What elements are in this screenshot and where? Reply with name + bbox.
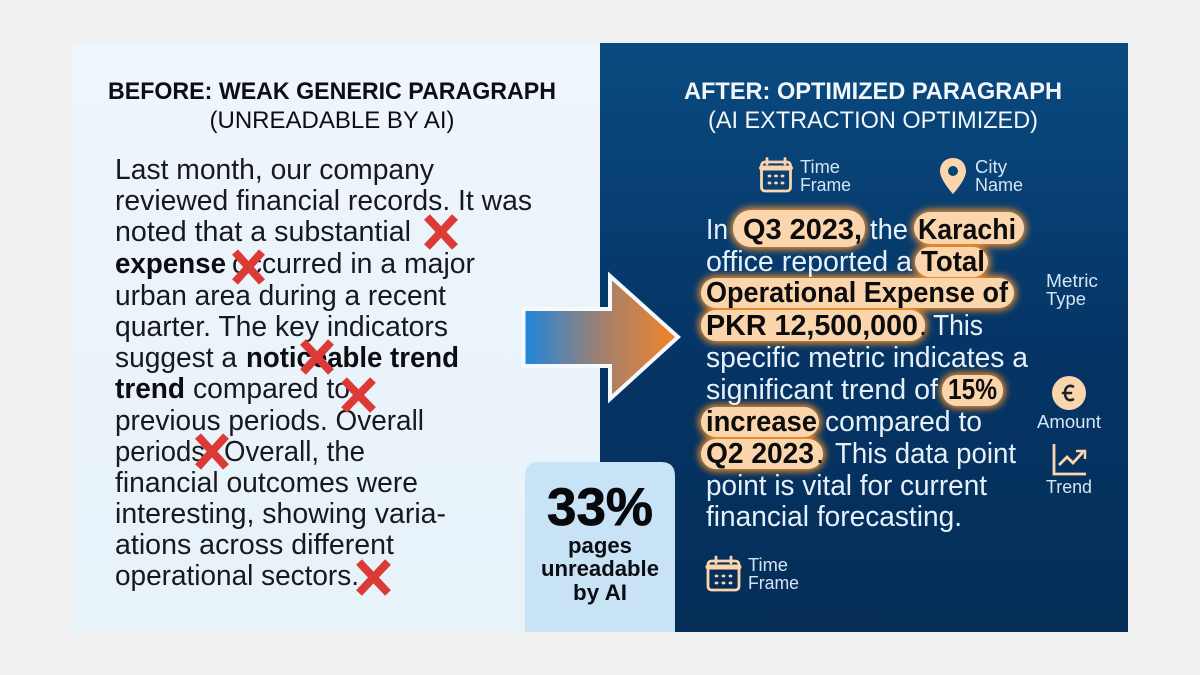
label: city name: City: [975, 156, 1008, 177]
text block: weak paragraph: interesting, showing varia-: [115, 498, 446, 530]
text block: weak paragraph: reviewed financial records. It was: [115, 185, 532, 217]
label: time frame top: Frame: [800, 174, 851, 195]
text block: weak paragraph: suggest a: [115, 342, 237, 374]
text block: weak paragraph: noticeable trend: [246, 342, 459, 374]
text block: optimized paragraph: office reported a: [706, 246, 912, 278]
icon: calendar time frame: [762, 158, 790, 191]
text block: weak paragraph: quarter. The key indicators: [115, 311, 448, 343]
text block: optimized paragraph: In: [706, 214, 728, 246]
label: time frame bottom: [748, 554, 799, 593]
text block: optimized paragraph: compared to: [825, 406, 982, 438]
text block: optimized paragraph: financial forecasting.: [706, 501, 962, 533]
text block: optimized paragraph: .: [919, 310, 927, 342]
text block: optimized paragraph: increase: [706, 406, 817, 438]
label: city name: [975, 156, 1023, 195]
text block: optimized paragraph: This: [933, 310, 983, 342]
label: trend: Trend: [1046, 476, 1092, 497]
stat value: 33%: [547, 478, 653, 537]
label: metric type: Type: [1046, 288, 1086, 309]
label: time frame top: Time: [800, 156, 840, 177]
text block: optimized paragraph: .: [816, 438, 824, 470]
text block: weak paragraph: ations across different: [115, 529, 394, 561]
text block: optimized paragraph: Total: [921, 246, 985, 278]
text block: weak paragraph: compared to: [193, 373, 350, 405]
text block: optimized paragraph: specific metric indicates a: [706, 342, 1028, 374]
label: metric type: [1046, 270, 1098, 309]
text block: weak paragraph: Last month, our company: [115, 154, 435, 186]
label: city name: Name: [975, 174, 1023, 195]
heading: before: BEFORE: WEAK GENERIC PARAGRAPH: [108, 78, 556, 105]
panel: before: [72, 43, 600, 632]
stat caption: pages: [568, 533, 632, 558]
text block: weak paragraph: Overall, the: [224, 436, 365, 468]
heading: before: (UNREADABLE BY AI): [210, 107, 454, 134]
text block: optimized paragraph: the: [870, 214, 908, 246]
text block: optimized paragraph: Q3 2023,: [743, 214, 862, 246]
text block: weak paragraph: expense: [115, 248, 226, 280]
heading: after: [684, 78, 1062, 134]
highlights: key data pills: [701, 210, 1024, 469]
text block: optimized paragraph: significant trend of: [706, 374, 938, 406]
text block: weak paragraph: periods: [115, 436, 205, 468]
panel: after: [600, 43, 1128, 632]
label: metric type: Metric: [1046, 270, 1098, 291]
text block: weak paragraph: operational sectors.: [115, 560, 359, 592]
icon: amount coin: [1052, 376, 1086, 410]
text block: optimized paragraph: [706, 214, 1028, 533]
text block: weak paragraph: urban area during a recent: [115, 280, 446, 312]
icons: red cross marks: [198, 217, 455, 593]
text block: weak paragraph: previous periods. Overall: [115, 405, 424, 437]
text block: weak paragraph: occurred in a major: [232, 248, 476, 280]
text block: optimized paragraph: PKR 12,500,000: [706, 310, 918, 342]
label: time frame bottom: Frame: [748, 572, 799, 593]
callout: 33 percent stat: [525, 462, 675, 632]
text block: optimized paragraph: This data point: [835, 438, 1016, 470]
text block: optimized paragraph: Operational Expense of: [706, 277, 1008, 309]
heading: after: AFTER: OPTIMIZED PARAGRAPH: [684, 78, 1062, 105]
label: time frame top: [800, 156, 851, 195]
icon: map pin: [940, 158, 966, 194]
icon: trend chart: [1054, 444, 1086, 474]
text block: optimized paragraph: Karachi: [918, 214, 1016, 246]
text block: weak paragraph: noted that a substantial: [115, 216, 411, 248]
stat caption: unreadable: [541, 556, 659, 581]
heading: after: (AI EXTRACTION OPTIMIZED): [708, 107, 1038, 134]
label: time frame bottom: Time: [748, 554, 788, 575]
stat caption: [541, 533, 659, 605]
icon: calendar time frame bottom: [708, 557, 739, 590]
label: amount: Amount: [1037, 411, 1101, 432]
text block: weak paragraph: trend: [115, 373, 185, 405]
text block: weak paragraph: [115, 154, 532, 592]
arrow: before to after: [524, 276, 678, 399]
heading: before: [108, 78, 556, 134]
text block: weak paragraph: financial outcomes were: [115, 467, 418, 499]
text block: optimized paragraph: 15%: [948, 374, 997, 406]
text block: optimized paragraph: point is vital for current: [706, 470, 987, 502]
stat caption: by AI: [573, 580, 627, 605]
text block: optimized paragraph: Q2 2023: [706, 438, 814, 470]
